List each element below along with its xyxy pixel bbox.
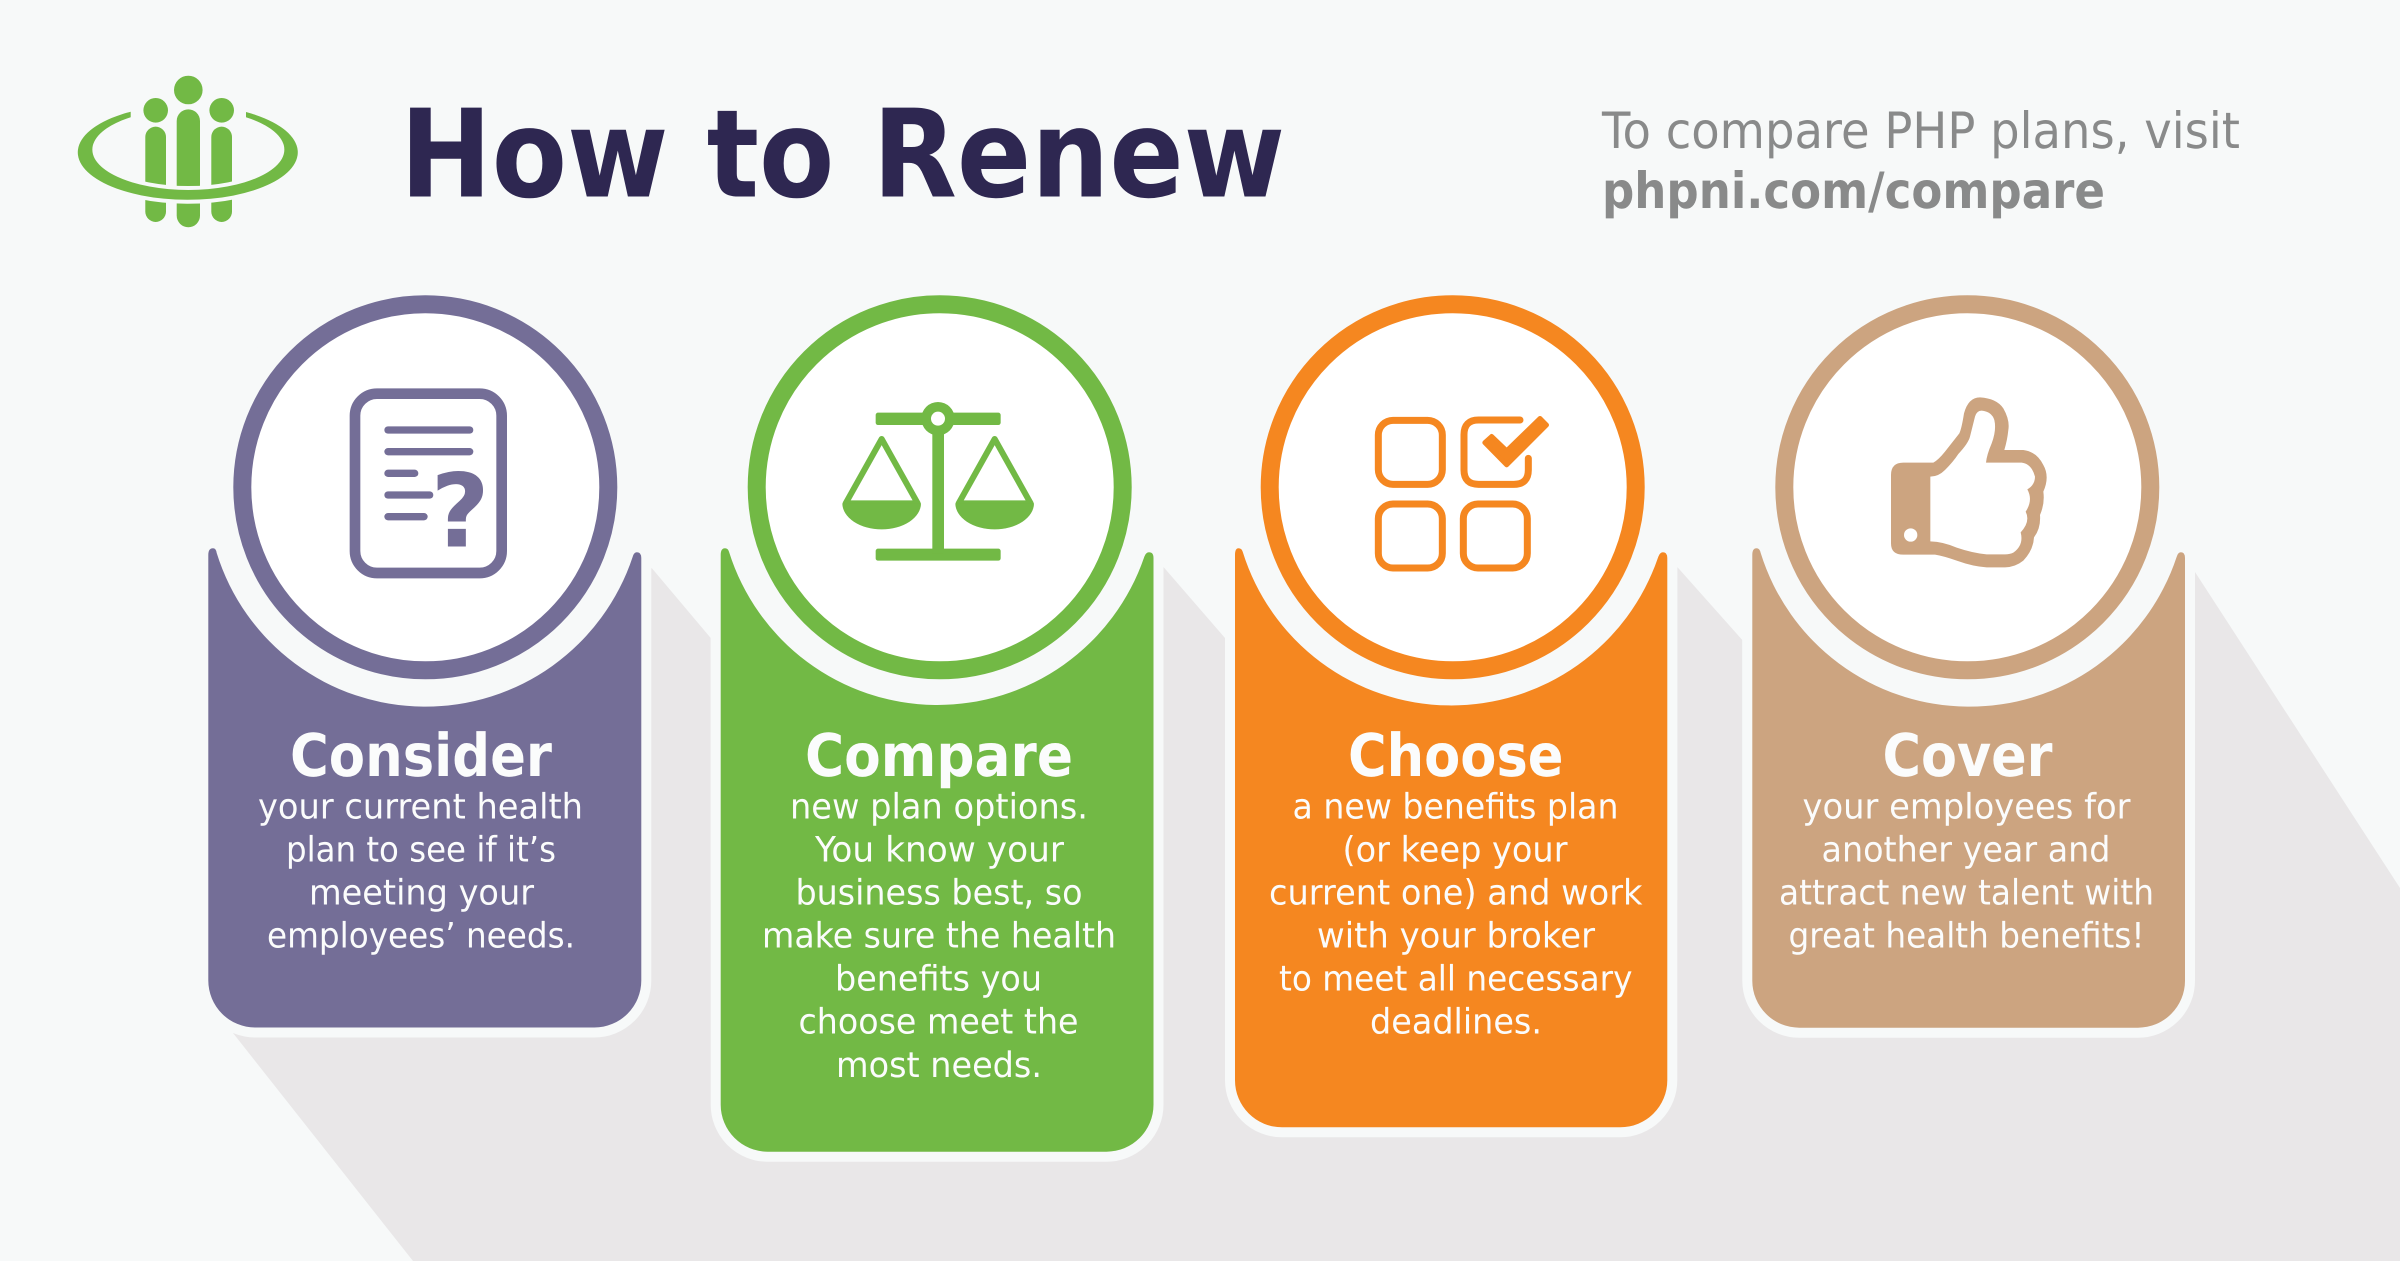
text: choose description <box>1269 788 1643 1043</box>
panel: consider <box>207 269 644 1028</box>
text: choose description: current one) and work <box>1269 874 1643 914</box>
panel: cover <box>1750 269 2187 1028</box>
text: consider description: your current health <box>258 788 583 828</box>
text: compare description: choose meet the <box>798 1003 1078 1043</box>
text: choose description: deadlines. <box>1370 1003 1542 1043</box>
call to action text: To compare PHP plans, visit <box>1601 102 2240 160</box>
heading: Cover: Cover <box>1882 721 2052 790</box>
text: choose description: to meet all necessary <box>1279 960 1632 1000</box>
call to action text <box>1601 102 2240 220</box>
text: choose description: with your broker <box>1317 917 1596 957</box>
panel: compare <box>720 269 1157 1152</box>
icon: document with question mark: ? <box>431 452 490 571</box>
text: consider description: plan to see if it’s <box>286 831 556 871</box>
text: consider description: employees’ needs. <box>267 917 575 957</box>
title: How to Renew <box>400 84 1285 226</box>
icon: document with question mark <box>355 394 502 573</box>
icon: balance scales <box>842 402 1034 561</box>
call to action text: phpni.com/compare <box>1602 162 2105 220</box>
text: cover description: great health benefits! <box>1788 917 2144 957</box>
text: consider description: meeting your <box>309 874 535 914</box>
text: compare description: new plan options. <box>790 788 1088 828</box>
text: cover description: attract new talent with <box>1779 874 2154 914</box>
text: compare description <box>762 788 1116 1086</box>
text: cover description: your employees for <box>1802 788 2131 828</box>
text: consider description <box>258 788 583 957</box>
text: compare description: make sure the health <box>762 917 1116 957</box>
heading: Compare: Compare <box>805 721 1073 790</box>
icon: thumbs up <box>1891 397 2047 567</box>
text: choose description: (or keep your <box>1342 831 1568 871</box>
text: compare description: benefits you <box>835 960 1042 1000</box>
panel: choose <box>1233 269 1669 1127</box>
text: compare description: You know your <box>814 831 1065 871</box>
text: compare description: business best, so <box>796 874 1082 914</box>
text: compare description: most needs. <box>836 1046 1042 1086</box>
text: cover description: another year and <box>1822 831 2110 871</box>
heading: Choose: Choose <box>1348 721 1564 790</box>
text: cover description <box>1779 788 2154 957</box>
icon: checklist grid <box>1378 418 1547 568</box>
icon: PHP logo <box>78 76 298 227</box>
heading: Consider: Consider <box>290 721 552 790</box>
text: choose description: a new benefits plan <box>1292 788 1618 828</box>
long cast shadow behind cards <box>233 567 2400 1261</box>
